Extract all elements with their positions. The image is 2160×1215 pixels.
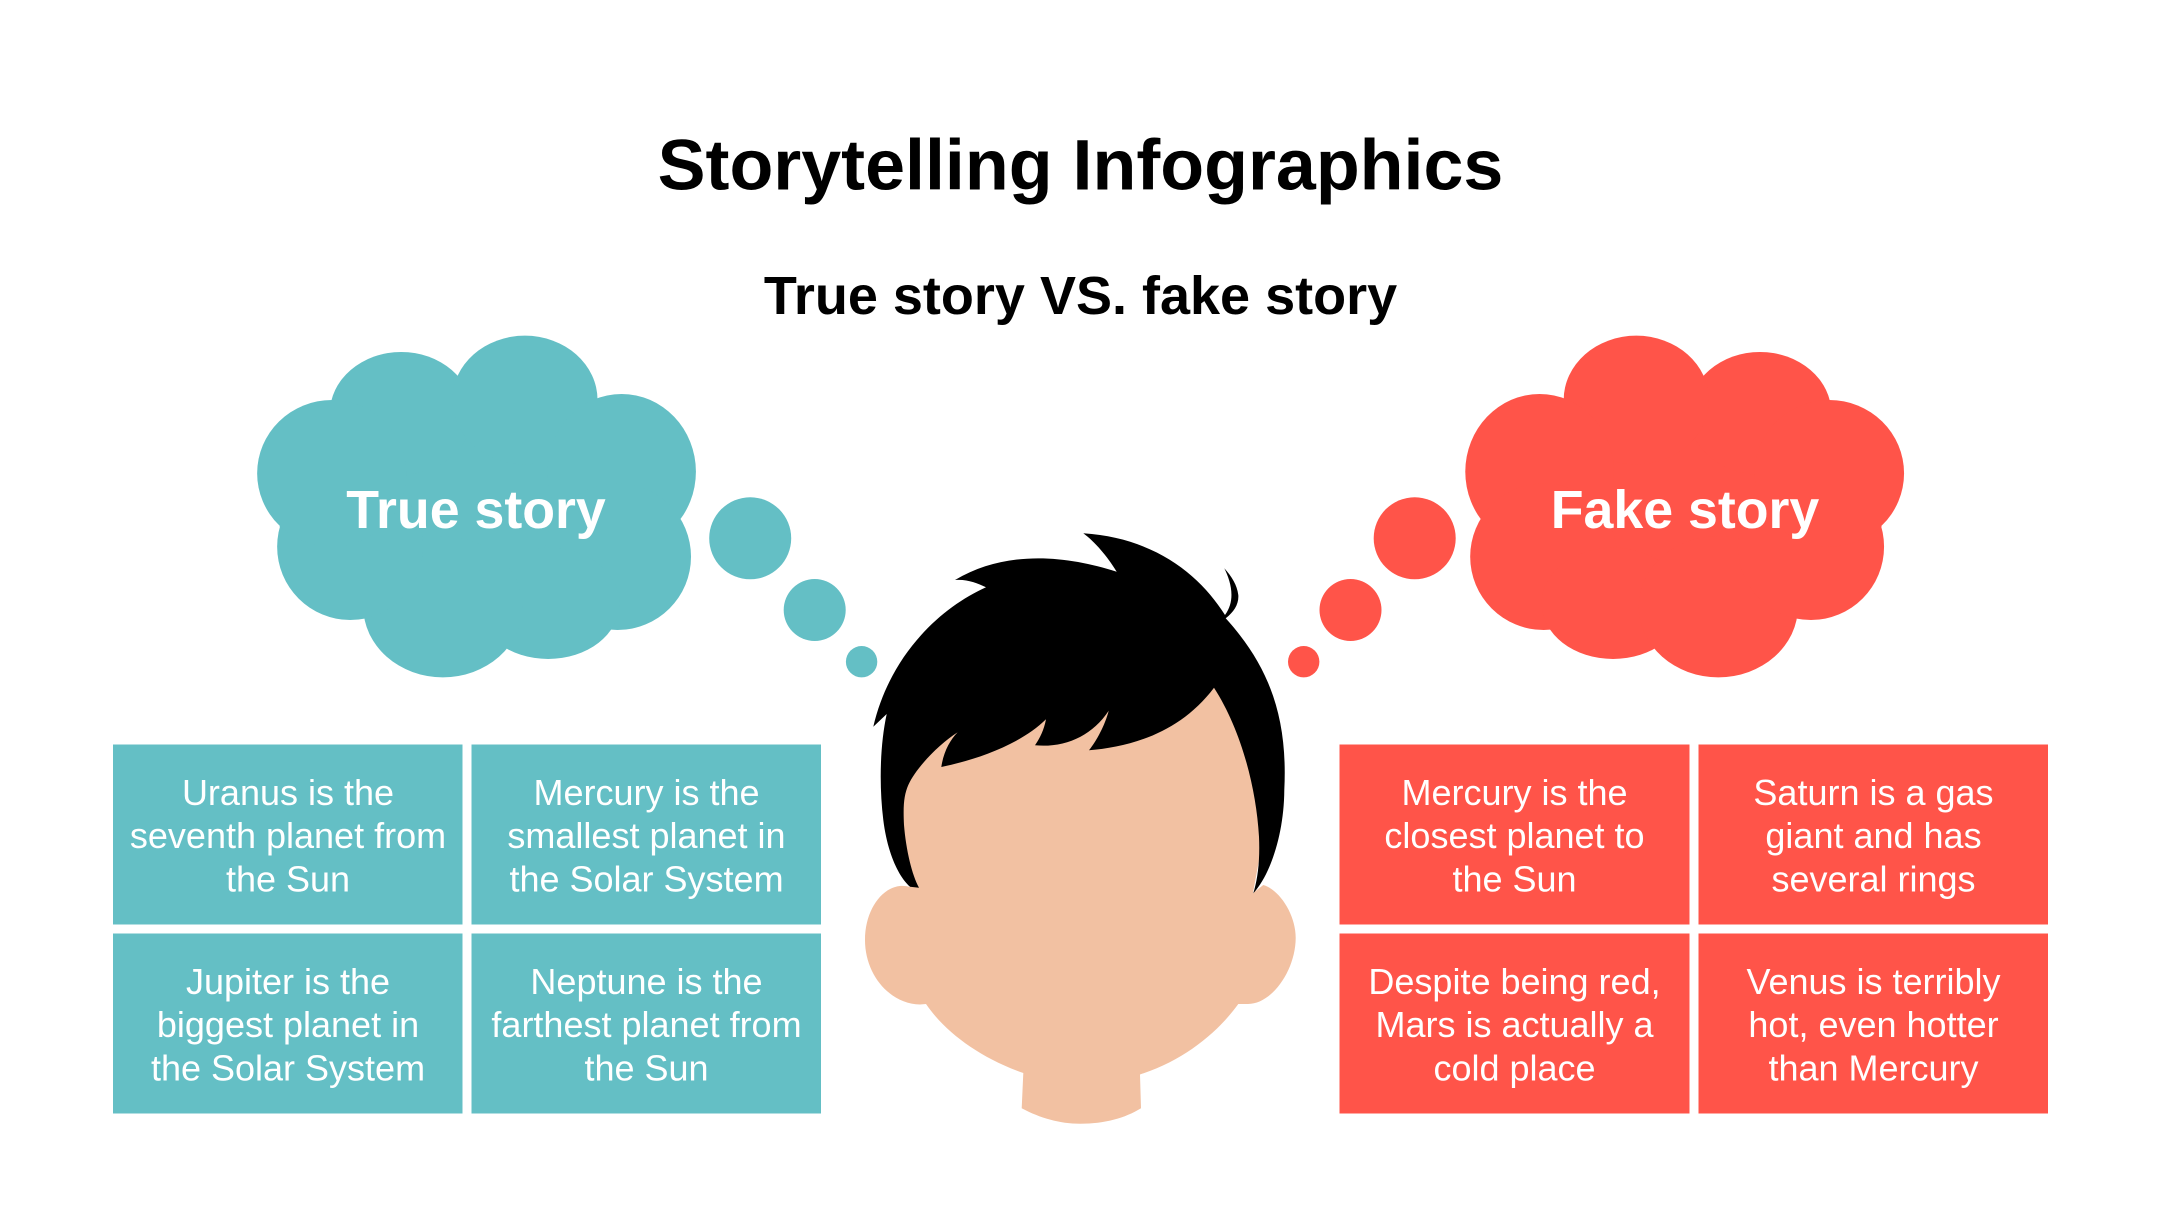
- thought cloud: true story: [257, 336, 696, 677]
- hair: [873, 533, 1285, 893]
- card: Venus: Venus is terribly: [1746, 961, 2001, 1002]
- card: Uranus: the Sun: [226, 858, 350, 899]
- card: Mercury: [472, 744, 821, 924]
- thought cloud: fake story: [1465, 336, 1904, 677]
- card: Neptune: farthest planet from: [491, 1004, 802, 1045]
- card: Mars: cold place: [1433, 1047, 1596, 1088]
- card: Mercury closest: the Sun: [1452, 858, 1577, 899]
- card: Mars: [1340, 934, 1690, 1114]
- card: Venus: [1698, 934, 2048, 1114]
- card: Jupiter: Jupiter is the: [186, 961, 390, 1002]
- card: Mercury closest: [1340, 744, 1690, 924]
- card: Venus: hot, even hotter: [1748, 1004, 1999, 1045]
- subtitle: True story VS. fake story: [764, 266, 1397, 326]
- card: Uranus: seventh planet from: [130, 815, 446, 856]
- card: Mercury: Mercury is the: [533, 772, 760, 813]
- card: Mars: Mars is actually a: [1375, 1004, 1655, 1045]
- card: Venus: than Mercury: [1768, 1047, 1979, 1088]
- card: Mars: Despite being red,: [1368, 961, 1661, 1002]
- card: Jupiter: [113, 934, 462, 1114]
- card: Saturn: [1698, 744, 2048, 924]
- card: Jupiter: the Solar System: [151, 1047, 425, 1088]
- cloud label: fake story: Fake story: [1551, 480, 1819, 540]
- card: Neptune: Neptune is the: [530, 961, 763, 1002]
- thought bubbles: fake story: [1288, 497, 1456, 677]
- card: Mercury closest: Mercury is the: [1401, 772, 1628, 813]
- card: Neptune: [472, 934, 821, 1114]
- cloud label: true story: True story: [346, 480, 606, 540]
- card: Saturn: Saturn is a gas: [1753, 772, 1994, 813]
- face with ears and neck: [865, 580, 1296, 1124]
- thought bubbles: true story: [709, 497, 877, 677]
- person head illustration: [865, 533, 1296, 1124]
- card: Uranus: Uranus is the: [182, 772, 394, 813]
- card: Mercury: smallest planet in: [507, 815, 786, 856]
- card: Neptune: the Sun: [584, 1047, 709, 1088]
- card: Mercury: the Solar System: [509, 858, 784, 899]
- title: Storytelling Infographics: [658, 126, 1503, 206]
- card: Saturn: several rings: [1771, 858, 1976, 899]
- panel: true story facts: [113, 744, 821, 1114]
- panel: fake story facts: [1340, 744, 2048, 1114]
- card: Mercury closest: closest planet to: [1384, 815, 1645, 856]
- card: Saturn: giant and has: [1765, 815, 1982, 856]
- card: Jupiter: biggest planet in: [157, 1004, 419, 1045]
- card: Uranus: [113, 744, 462, 924]
